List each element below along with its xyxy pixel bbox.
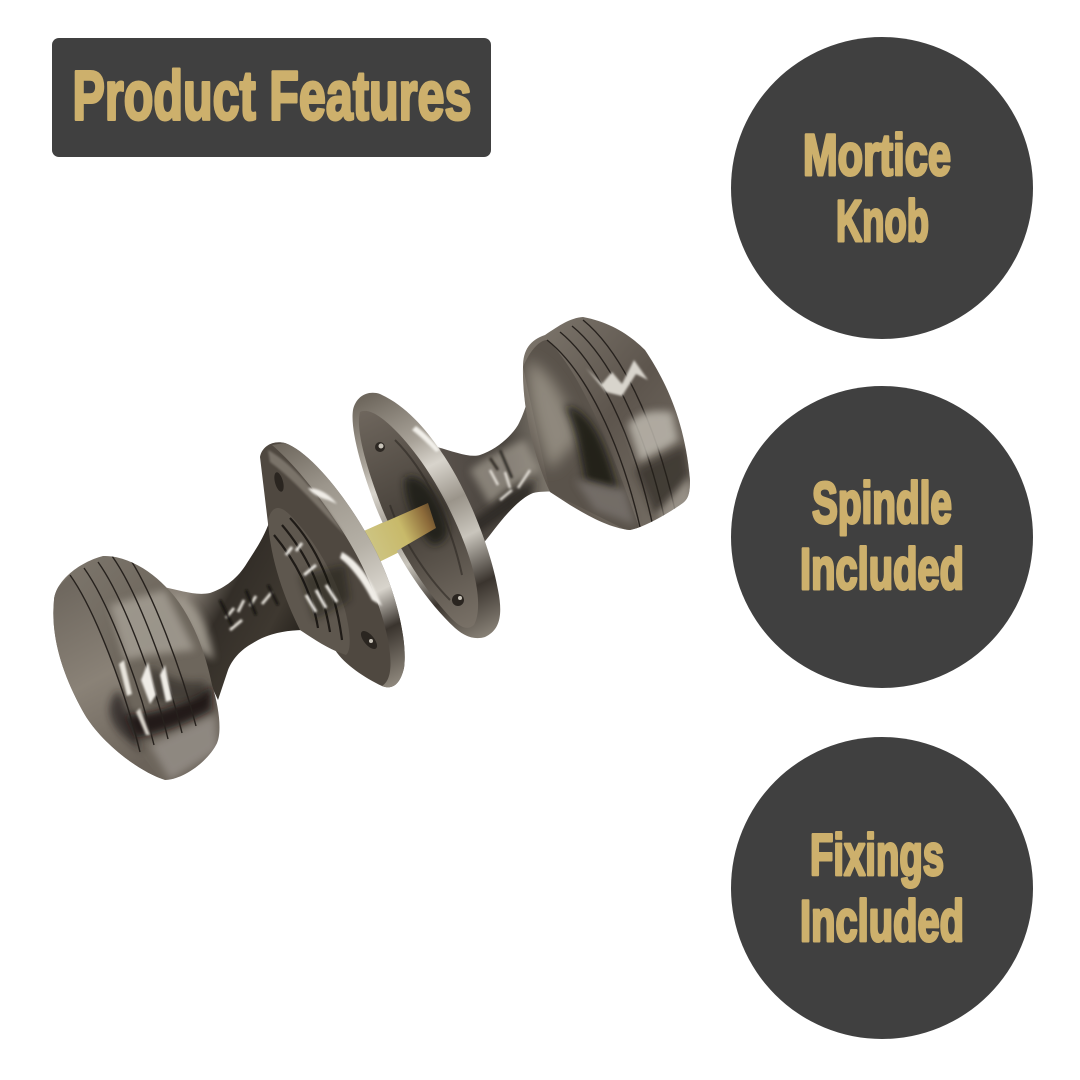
badge: Mortice Knob: Knob [836, 189, 929, 254]
spindle in right plate [355, 503, 436, 567]
left plate rim [272, 443, 405, 687]
right plate inner face [359, 411, 478, 628]
badge: Mortice Knob [731, 37, 1033, 339]
left knob neck [166, 524, 300, 700]
ribs right [547, 320, 675, 527]
badge: Spindle Included: Included [800, 537, 964, 602]
title text: Product Features [72, 56, 472, 134]
left rose plate [260, 442, 405, 687]
spindle [355, 496, 452, 567]
right rose plate [353, 393, 500, 638]
badge: Spindle Included: Spindle [812, 471, 952, 536]
ribs left [70, 553, 196, 752]
badge: Mortice Knob: Mortice [803, 123, 951, 188]
product photo: mortice knob set [45, 310, 695, 785]
title banner [52, 38, 491, 157]
badge: Fixings Included [731, 737, 1033, 1039]
left stepped rose [268, 508, 350, 655]
right knob head [522, 317, 690, 530]
right knob neck [438, 407, 550, 542]
badge: Spindle Included [731, 386, 1033, 688]
badge: Fixings Included: Fixings [810, 823, 944, 888]
badge: Fixings Included: Included [800, 889, 964, 954]
left knob head [53, 556, 220, 780]
